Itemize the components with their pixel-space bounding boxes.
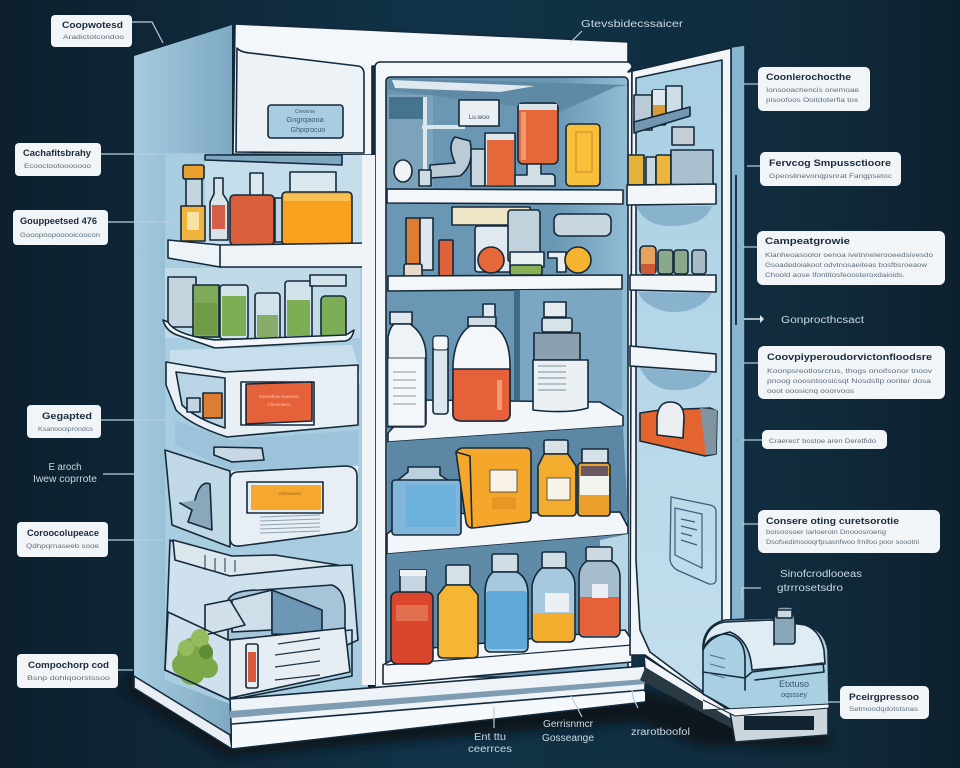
gray tube — [554, 214, 611, 236]
bottom label 2 — [542, 696, 594, 744]
label: lower drawer: Compochorp cod — [28, 660, 109, 671]
right wall lighter — [520, 290, 622, 410]
label: drawer — [27, 405, 170, 438]
door third bin items — [640, 246, 706, 274]
shelf 2 — [388, 275, 622, 291]
label: freezer shelf — [15, 143, 205, 176]
label: compartment: Gsoadedoiakoot odvtnosaeiteas bosfbsroeaow — [765, 262, 927, 269]
label: door shelf: pnoog ooosntoosicsqt Nosdsfip ooriter dosa — [767, 378, 931, 385]
open right door — [627, 45, 745, 716]
plain label: side: E aroch — [48, 462, 82, 473]
label: compressor — [828, 686, 929, 719]
label: upper door: Coonlerochocthe — [766, 72, 851, 83]
orange box — [485, 133, 515, 186]
door inner — [636, 60, 722, 706]
green containers shelf — [163, 268, 360, 348]
label: upper door — [743, 67, 870, 111]
orange drawer label — [246, 382, 312, 424]
plain label: side — [33, 462, 134, 485]
red white bottle — [210, 178, 228, 240]
label: control box: Qdhpqrnaseeb sooe — [26, 543, 99, 550]
machine — [452, 207, 544, 275]
bottom label 2: Gosseange — [542, 733, 594, 744]
door shelf 1 — [627, 184, 716, 226]
door panel outline — [670, 497, 716, 584]
label: compartment — [743, 231, 945, 285]
plain label with arrow: Sinofcrodlooeas — [780, 569, 862, 580]
drawer front — [165, 612, 352, 700]
label: upper door bin: Gooopoopooooicoocon — [20, 232, 100, 239]
center compartment interior — [386, 77, 628, 677]
label: door shelf — [743, 346, 945, 399]
compressor text: oqsssey — [781, 692, 807, 699]
label: lower drawer: Bsnp dohlqoorstssoo — [27, 675, 110, 682]
upper left shelf: bottles — [181, 155, 362, 245]
label: conserve — [742, 510, 940, 553]
orange tube — [404, 218, 433, 277]
blue yellow bottle — [532, 552, 575, 642]
label: upper door bin — [13, 210, 180, 245]
red vial — [579, 547, 620, 637]
center frame — [375, 62, 632, 692]
control box — [165, 447, 358, 547]
left interior column — [165, 155, 368, 704]
orange box — [456, 448, 531, 528]
blue gap under drawer — [175, 420, 358, 470]
right base corner — [640, 656, 735, 730]
label: narrow strip: Craerect' bostoe aren Deretfido — [769, 438, 876, 445]
arrow and plain label: Gonprocthcsact — [781, 315, 864, 326]
yellow round — [565, 247, 591, 273]
label: conserve: boisoosoer Iarloeroin Dnooosroerig — [766, 529, 886, 536]
green jar 3 — [285, 281, 312, 338]
door shelf 3 — [630, 346, 716, 390]
plain label with arrow: gtrrrosetsdro — [777, 583, 844, 594]
label: compartment: Choold aose Ifontitosfeoosteroxdaioids. — [765, 272, 905, 279]
bottom label 1: Ent ttu — [474, 732, 506, 743]
fifth compartment bottles — [391, 547, 620, 664]
top plain label: Gtevsbidecssaicer — [581, 19, 684, 30]
blue canister — [392, 467, 461, 535]
shelf 1 — [387, 189, 623, 204]
tap — [548, 252, 566, 272]
compressor text — [779, 679, 809, 699]
label: conserve: Dsofsedimsooqrfpsasnfwoo frnifoo poor soootnl — [766, 539, 920, 546]
machinery window — [205, 585, 345, 640]
freezer label plate: Gngrqaooa — [286, 115, 325, 124]
fourth compartment items — [392, 440, 610, 535]
bottom label 1: ceerrces — [468, 744, 512, 755]
yellow bottle — [438, 565, 478, 658]
small tube — [433, 336, 448, 414]
third compartment bottles — [388, 302, 588, 427]
top freezer door — [233, 24, 628, 155]
label: upper door: pisoofoos Ooitdoterfia tox — [766, 97, 859, 104]
small drawer item — [187, 393, 222, 418]
bottom label 1 — [468, 707, 512, 755]
shelf rack — [173, 540, 338, 576]
pipes — [388, 95, 485, 188]
label: control box — [17, 522, 163, 557]
plain label with arrow — [742, 569, 862, 600]
top vent plate — [214, 447, 264, 462]
second compartment items — [404, 207, 611, 277]
label box: Lu.woo — [469, 114, 490, 121]
red tube — [246, 644, 258, 688]
label: freezer shelf: Cachafitsbrahy — [23, 148, 92, 159]
green jar 4 — [310, 275, 346, 338]
door edge strip — [731, 45, 745, 700]
freezer label plate: Crevsrse — [295, 109, 315, 115]
orange round — [478, 247, 504, 273]
top plain label — [571, 19, 684, 42]
tall bottle — [181, 165, 205, 241]
red container — [230, 173, 274, 245]
freezer label plate: Ghpqrocuo — [291, 127, 325, 134]
ceiling — [388, 78, 628, 112]
label: upper door: Ionsooachencis onemoae — [766, 87, 859, 94]
door second bin items — [628, 150, 713, 185]
label: narrow strip — [742, 430, 887, 449]
floor — [383, 630, 632, 684]
orange jar — [515, 103, 558, 186]
top compartment items — [388, 95, 600, 188]
base — [134, 666, 645, 749]
door upper bin items — [634, 86, 694, 145]
shelf tray — [163, 320, 354, 348]
yellow label: Ghesraose — [279, 491, 302, 496]
label: compressor: Setmoodqdotstsnas — [849, 706, 919, 713]
red tube small — [439, 240, 453, 277]
fourth compartment shelf — [387, 512, 628, 554]
label: door shelf: Koonpsreotlosrcrus, thogs onoifsonor tnoov — [767, 368, 933, 375]
label: top left: Coopwotesd — [62, 20, 123, 31]
label: compartment: Campeatgrowie — [765, 236, 850, 247]
green jar 2 — [255, 293, 280, 339]
fourth compartment background — [388, 426, 628, 540]
refrigerator body — [134, 24, 632, 735]
label: lower drawer — [17, 654, 133, 688]
left side panel — [134, 25, 232, 735]
yellow box — [566, 124, 600, 186]
label: drawer: Gegapted — [42, 411, 92, 422]
door shelf 2 — [630, 275, 716, 312]
bottom label 2: Gerrisnmcr — [543, 719, 594, 730]
label box — [459, 100, 499, 126]
green jar 1 — [220, 285, 248, 339]
yellow label — [247, 482, 323, 513]
orange drawer label: Sarusdhoe boesoxe — [259, 394, 300, 399]
label: freezing — [747, 152, 901, 186]
red bottle — [391, 570, 433, 664]
compressor text: Etxtuso — [779, 679, 809, 689]
freezer label plate — [268, 105, 343, 138]
large orange bottle — [453, 304, 510, 421]
label: freezer shelf: Ecooctootooooooo — [24, 163, 91, 170]
compressor appliance — [703, 607, 829, 742]
label: door shelf: Coovpiyperoudorvictonfloodsre — [767, 352, 932, 363]
fridge shadow — [122, 675, 830, 756]
valve — [180, 483, 212, 530]
small vial — [578, 449, 610, 516]
arrow and plain label — [744, 315, 864, 326]
orange drawer label: Chnoioaero — [267, 402, 291, 407]
bottom label 3: zrarotboofol — [631, 727, 690, 738]
lettuce — [172, 629, 218, 685]
label: compressor: Pceirgpressoo — [849, 692, 919, 703]
fifth compartment background — [387, 534, 628, 665]
door frame — [628, 48, 731, 716]
bottom label 3 — [631, 690, 690, 738]
vent slots — [275, 638, 320, 680]
lower drawer with machinery — [165, 540, 358, 700]
label: conserve: Consere oting curetsorotie — [766, 516, 899, 527]
label: compartment: Klanheoasoolor oenoa ivetnnelerooeedsivesdo — [765, 252, 933, 259]
orange door holder — [640, 402, 717, 456]
label: top left — [51, 15, 163, 47]
vent lines — [260, 515, 320, 533]
label: control box: Coroocolupeace — [27, 528, 99, 539]
label: drawer: Ksanoooiprondcs — [38, 426, 94, 433]
label: freezing: Gpeoslinevonqpsnrat Fangpsetoc — [769, 173, 893, 180]
blue bottle — [485, 554, 528, 652]
handle — [774, 607, 795, 645]
upper left shelf board — [168, 240, 368, 267]
white bottle — [388, 312, 426, 427]
plain label: side: Iwew coprrote — [33, 474, 97, 485]
middle drawer — [166, 345, 360, 437]
label: top left: Aradictotcondoo — [63, 34, 124, 41]
divider column — [362, 155, 375, 685]
third compartment shelf — [388, 400, 623, 442]
label: upper door bin: Gouppeetsed 476 — [20, 216, 97, 227]
orange container — [275, 172, 352, 245]
divider post — [514, 290, 520, 400]
yellow bottle — [538, 440, 576, 516]
label: freezing: Fervcog Smpussctioore — [769, 158, 891, 169]
herb jar — [193, 285, 219, 337]
label: door shelf: ooot ooosicnq ooorvoos — [767, 388, 855, 395]
right jar — [533, 302, 588, 412]
